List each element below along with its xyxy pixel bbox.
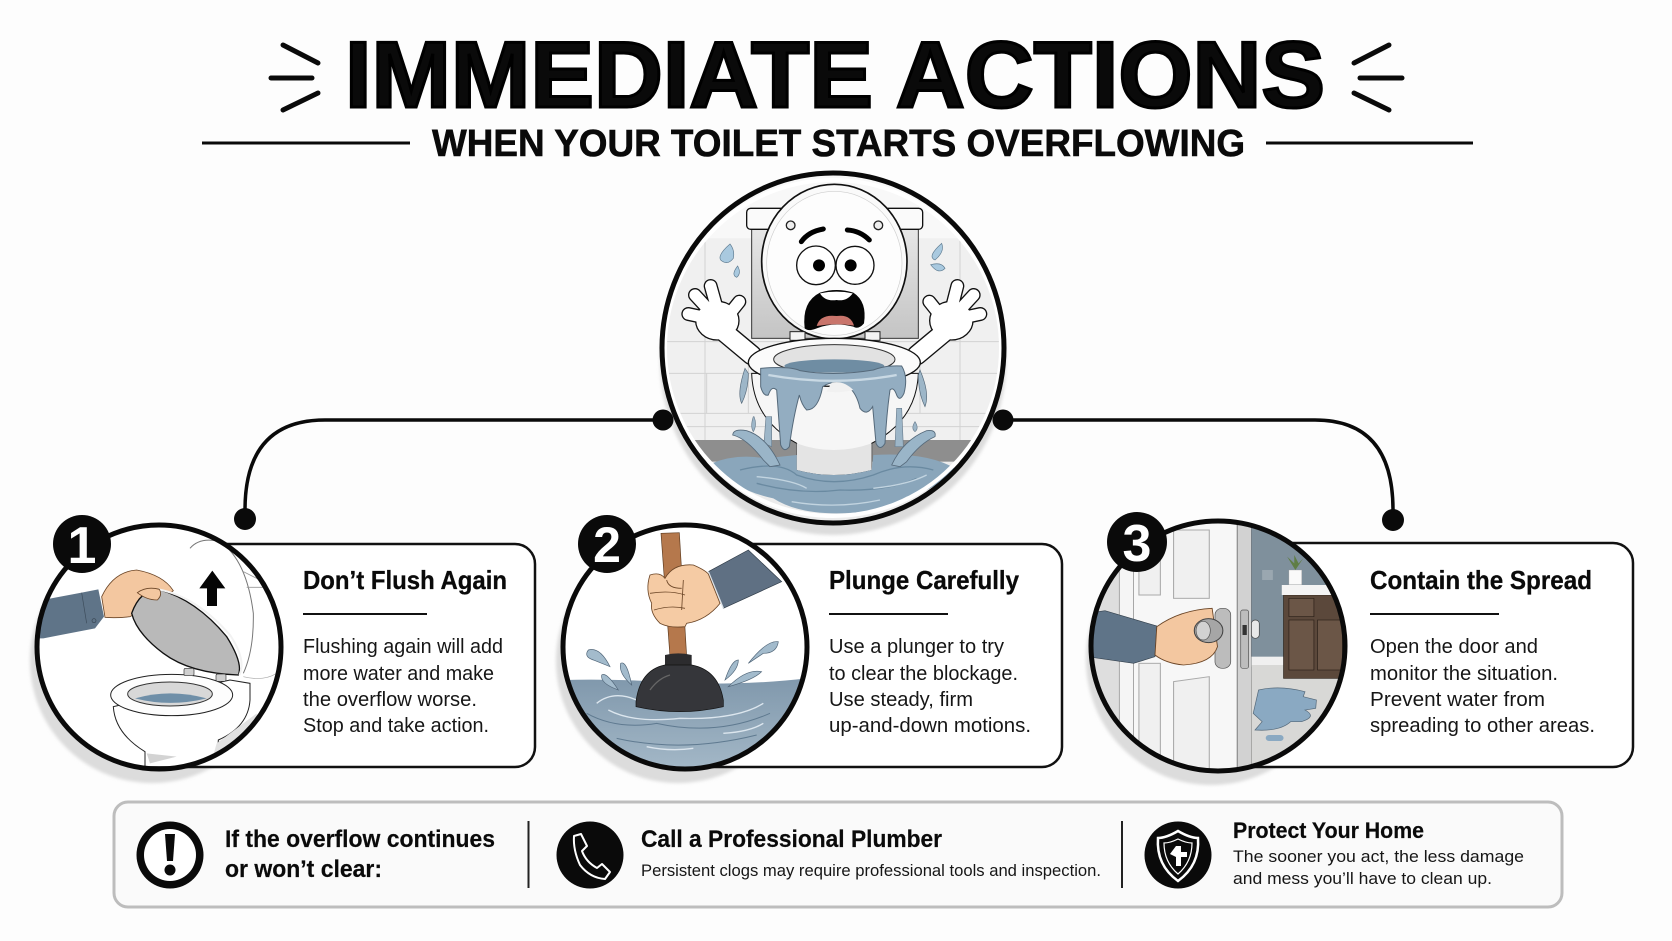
divider and text: step 2 description xyxy=(829,614,1031,737)
icon: exclamation warning xyxy=(136,822,204,888)
text: call a professional plumber xyxy=(641,826,1101,880)
badge: number 2: 2 xyxy=(593,517,621,573)
divider and text: step 1 description: the overflow worse. xyxy=(303,689,477,711)
badge: number 1: 1 xyxy=(68,517,96,575)
divider and text: step 3 description: Prevent water from xyxy=(1370,689,1545,711)
divider and text: step 1 description xyxy=(303,614,503,737)
badge: number 3 xyxy=(1107,512,1167,573)
text: call a professional plumber: Call a Professional Plumber xyxy=(641,826,942,853)
divider and text: step 3 description: monitor the situation. xyxy=(1370,663,1558,685)
panel: central scared toilet illustration xyxy=(660,173,1007,535)
icon: right emphasis burst xyxy=(1354,45,1402,110)
arrow: connector to step 1 xyxy=(234,410,674,530)
side drops xyxy=(720,244,734,263)
heading: step 2: Plunge Carefully xyxy=(829,565,1020,595)
overflow water xyxy=(761,366,906,450)
panel: step 3 contain the spread xyxy=(1086,512,1633,785)
badge: number 3: 3 xyxy=(1123,515,1151,573)
divider and text: step 3 description xyxy=(1370,614,1595,737)
text: protect your home: and mess you’ll have to clean up. xyxy=(1233,869,1492,888)
subtitle: WHEN YOUR TOILET STARTS OVERFLOWING xyxy=(432,123,1245,165)
divider and text: step 2 description: to clear the blockage. xyxy=(829,663,1018,685)
divider and text: step 3 description: spreading to other areas. xyxy=(1370,715,1595,737)
text: if the overflow continues: or won’t clear: xyxy=(225,856,382,883)
title: IMMEDIATE ACTIONS xyxy=(345,22,1325,127)
arrow: connector to step 3 xyxy=(992,410,1404,531)
divider and text: step 2 description: Use steady, firm xyxy=(829,689,973,711)
tank xyxy=(752,228,918,338)
illustration: hand using plunger in water xyxy=(563,525,807,777)
icon: left emphasis burst xyxy=(271,45,318,110)
face xyxy=(801,229,823,242)
text: if the overflow continues xyxy=(225,826,495,883)
divider and text: step 3 description: Open the door and xyxy=(1370,636,1538,658)
text: protect your home: The sooner you act, the less damage xyxy=(1233,847,1524,866)
divider and text: step 2 description: Use a plunger to try xyxy=(829,636,1004,658)
heading: step 3: Contain the Spread xyxy=(1370,565,1592,595)
floor puddle xyxy=(712,454,955,513)
divider and text: step 1 description: Stop and take action. xyxy=(303,715,489,737)
panel: step 2 plunge carefully xyxy=(556,515,1062,783)
arms and hands xyxy=(688,286,980,355)
seat lid xyxy=(762,184,907,339)
illustration: hand lifting toilet lid xyxy=(33,525,281,769)
text: call a professional plumber: Persistent clogs may require professional tools and inspection. xyxy=(641,861,1101,880)
bowl xyxy=(752,373,918,475)
illustration: hand opening bathroom door xyxy=(1087,520,1353,778)
panel: step 1 don't flush again xyxy=(30,515,535,783)
divider and text: step 1 description: Flushing again will add xyxy=(303,636,503,658)
divider and text: step 1 description: more water and make xyxy=(303,663,494,685)
badge: number 2 xyxy=(578,515,636,573)
panel: bottom escalation bar xyxy=(114,802,1562,907)
divider and text: step 2 description: up-and-down motions. xyxy=(829,715,1031,737)
text: if the overflow continues: If the overflow continues xyxy=(225,826,495,853)
card: step 2 xyxy=(680,544,1062,767)
icon: shield xyxy=(1144,822,1212,888)
card: step 1 xyxy=(150,544,535,767)
heading: step 1: Don’t Flush Again xyxy=(303,565,507,595)
splashes xyxy=(733,430,780,467)
icon: phone xyxy=(556,822,624,888)
text: protect your home: Protect Your Home xyxy=(1233,818,1424,843)
card: step 3 xyxy=(1210,543,1633,767)
badge: number 1 xyxy=(53,515,111,575)
text: protect your home xyxy=(1233,818,1524,888)
